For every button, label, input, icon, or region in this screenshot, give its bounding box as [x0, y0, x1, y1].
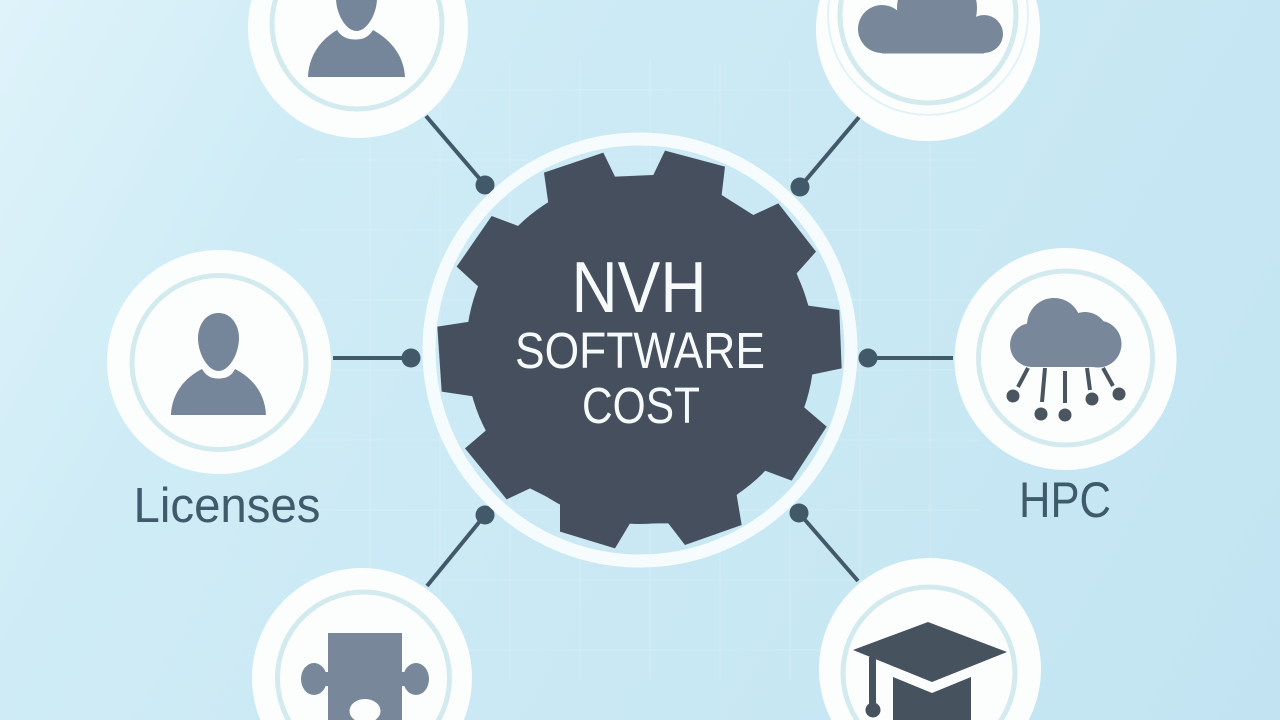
title: NVH SOFTWARE COST: [515, 248, 765, 434]
node: top-right cloud: [816, 0, 1040, 141]
central gear: [437, 151, 842, 548]
icon: cloud: [858, 0, 1003, 54]
node: bottom-left puzzle: [252, 568, 472, 720]
connector: top-right: [790, 116, 860, 196]
node: top-left person: [248, 0, 468, 138]
icon: person: [171, 313, 266, 415]
label: HPC: HPC: [1019, 472, 1111, 528]
connector: bottom-left: [427, 506, 494, 586]
node: licenses: [107, 250, 331, 474]
node: HPC: [954, 248, 1176, 470]
label: Licenses: Licenses: [134, 479, 320, 533]
connector: bottom-right: [790, 504, 858, 581]
title: NVH SOFTWARE COST: NVH: [572, 248, 706, 328]
icon: graduation cap: [853, 622, 1007, 720]
connector: top-left: [426, 116, 494, 194]
icon: HPC cloud: [1006, 298, 1126, 422]
icon: person top-left: [308, 0, 405, 77]
connector: left: [333, 348, 420, 368]
connector: right: [858, 348, 953, 368]
title: NVH SOFTWARE COST: SOFTWARE: [515, 322, 765, 379]
title: NVH SOFTWARE COST: COST: [582, 377, 700, 434]
icon: puzzle piece: [301, 633, 429, 720]
node: bottom-right graduation cap: [819, 558, 1041, 720]
central ring: [429, 139, 851, 561]
